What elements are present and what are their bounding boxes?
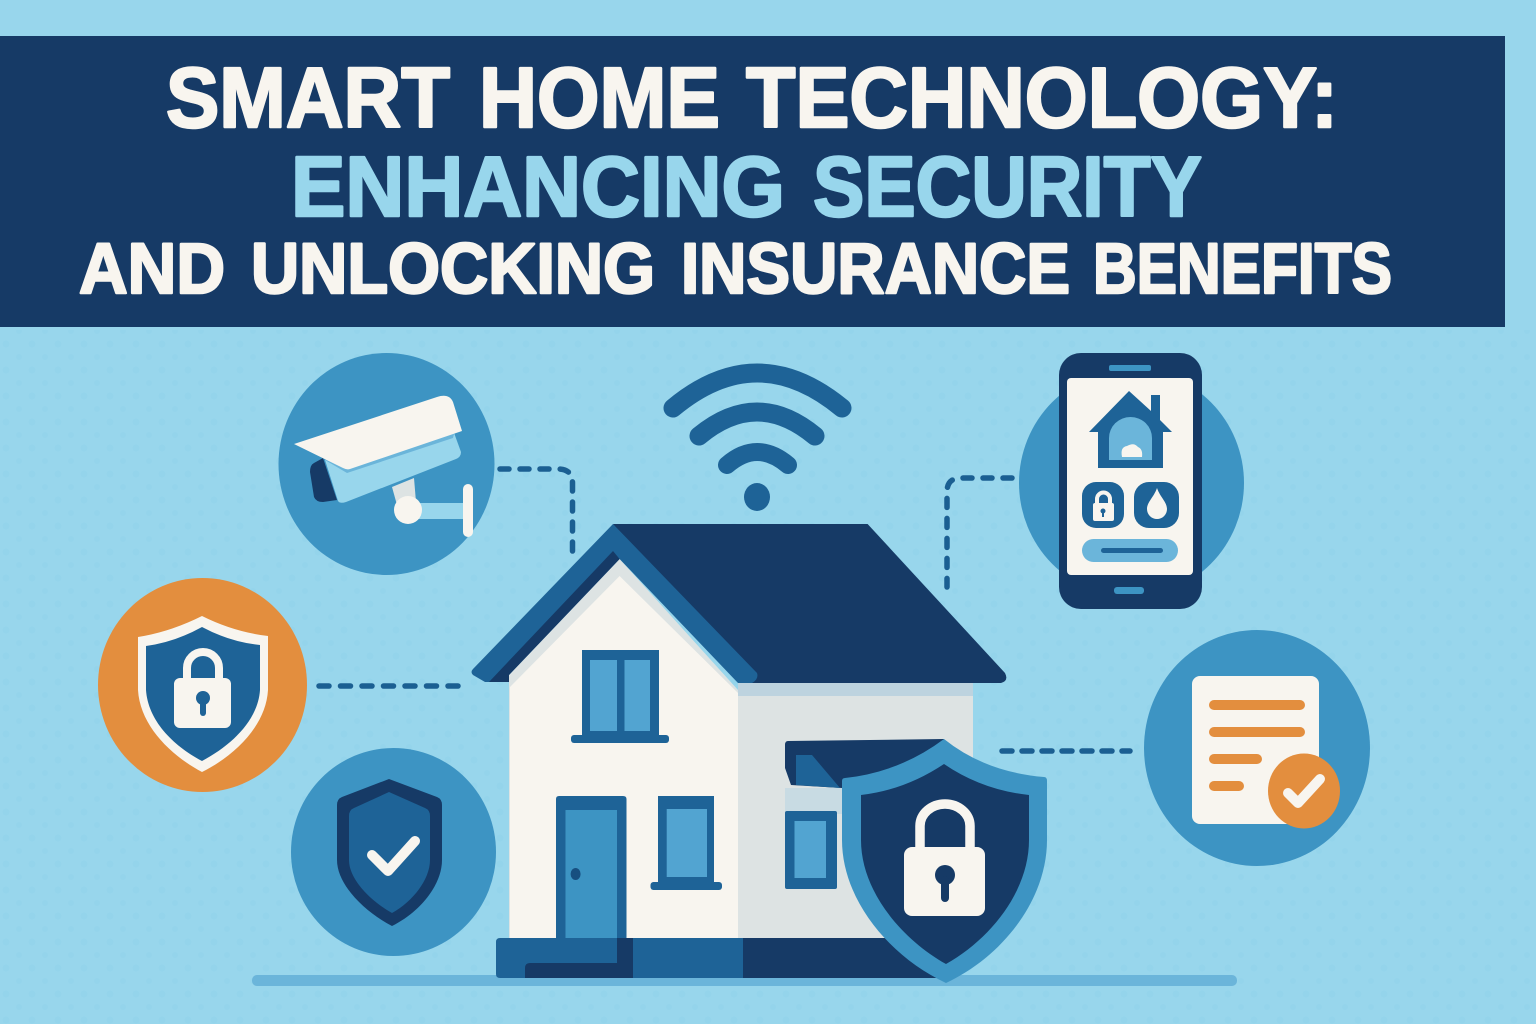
icon: orange shield lock badge [98,578,307,792]
phone status pill [1082,539,1178,562]
phone water drop tile [1134,482,1179,528]
icon: smartphone app [1019,353,1244,609]
phone lock tile [1082,482,1124,528]
icon: large security shield with padlock [842,739,1047,983]
title line 3: AND [79,230,225,309]
upper window [571,650,669,743]
icon: shield check badge [291,748,496,956]
ground strip [252,975,1237,986]
phone screen home icon [1089,391,1172,468]
lower window [650,796,722,890]
connector: shield to document [1002,748,1130,754]
connector: camera to house [500,469,572,557]
title line 3: INSURANCE [681,230,1070,309]
foundation and steps [496,938,938,978]
title line 1 [166,51,1338,146]
icon: insurance document badge [1144,630,1370,866]
right wing wall [738,683,973,938]
icon: security camera [278,353,494,575]
title banner [0,36,1505,327]
illustration: house [472,524,1006,978]
front gable wall [509,559,738,938]
front door [556,796,626,938]
title line 1: SMART [166,51,450,146]
title line 2: SECURITY [813,140,1202,235]
title line 1: TECHNOLOGY: [746,51,1338,146]
connector: lock badge to house [319,683,458,689]
title line 3: UNLOCKING [251,230,655,309]
title line 1: HOME [479,51,720,146]
title line 3 [79,230,1392,309]
gable eave shadow [489,551,620,682]
title line 3: BENEFITS [1093,230,1392,309]
connector: phone to house [947,478,1012,587]
title line 2: ENHANCING [291,140,785,235]
awning [785,739,944,814]
gable eaves [472,524,757,683]
side window [785,811,837,889]
icon: wifi signal [673,373,842,511]
main roof [613,524,1006,683]
title line 2 [291,140,1202,235]
